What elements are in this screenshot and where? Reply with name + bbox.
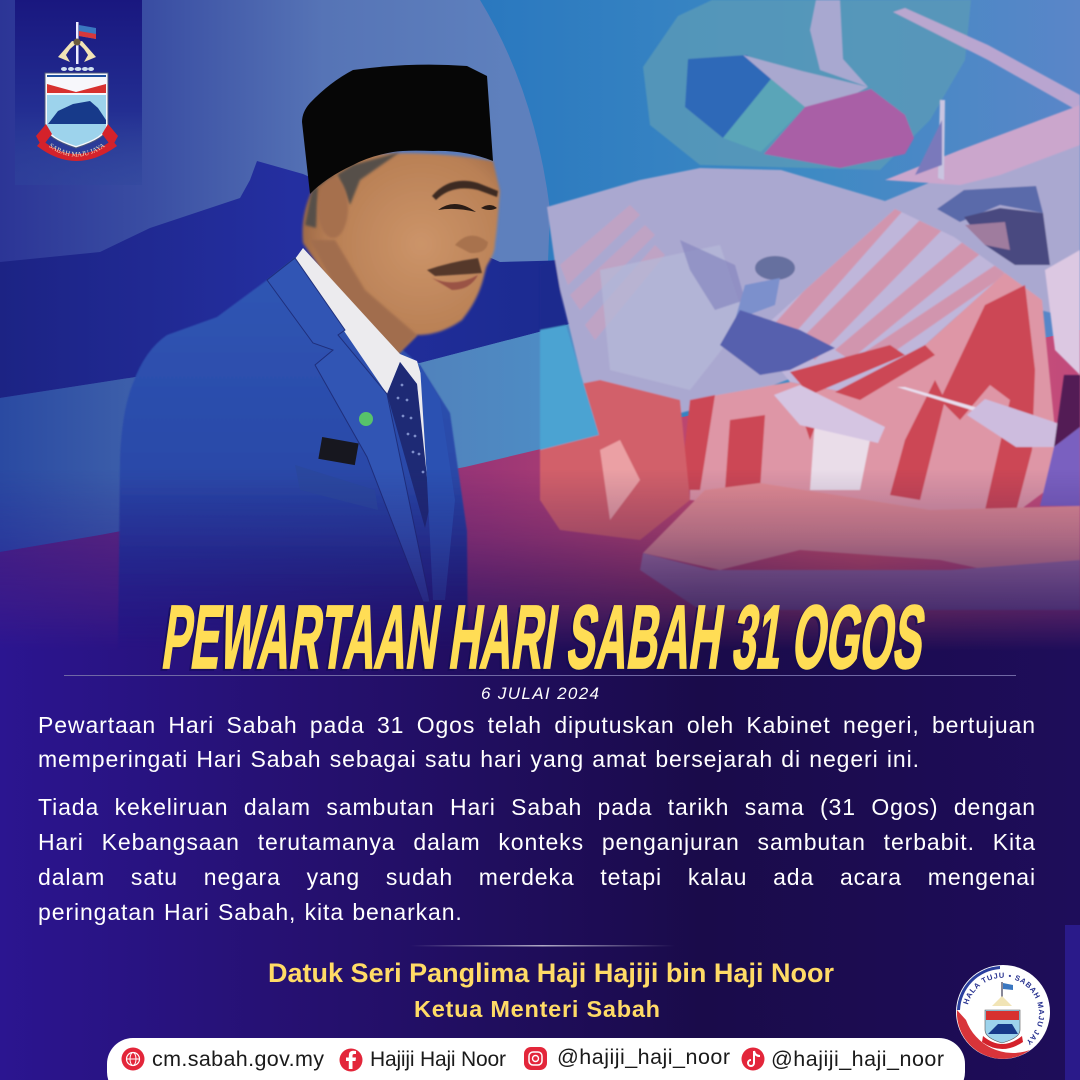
face and scarf of flag bearer <box>964 208 1050 265</box>
cap <box>302 65 493 194</box>
hat of flag bearer <box>937 186 1043 222</box>
small lightblue strip <box>540 325 599 450</box>
background: sky blue <box>0 0 1080 700</box>
lower right edge strip <box>1065 925 1080 1080</box>
shield <box>45 73 108 148</box>
portrait of the Chief Minister <box>118 65 500 650</box>
body paragraph 2: peringatan Hari Sabah, kita benarkan. <box>38 899 463 925</box>
name tag <box>318 437 359 465</box>
icon: facebook <box>340 1048 362 1072</box>
person in background silhouette <box>755 256 795 280</box>
pink flag shape <box>764 89 914 168</box>
teal flag panel <box>643 0 971 170</box>
footer pill <box>107 1038 965 1080</box>
body paragraph 2 <box>38 794 1036 925</box>
facebook text: Hajiji Haji Noor <box>370 1048 506 1071</box>
website text: cm.sabah.gov.my <box>152 1047 324 1071</box>
speaker name: Datuk Seri Panglima Haji Hajiji bin Haji Noor <box>268 958 834 988</box>
body paragraph 1: Pewartaan Hari Sabah pada 31 Ogos telah diputuskan oleh Kabinet negeri, bertujuan <box>38 712 1036 738</box>
blue flag shape <box>685 55 771 138</box>
breast pocket <box>295 465 378 510</box>
left red flag edges <box>540 380 690 540</box>
flag pole <box>893 8 1080 112</box>
icon: tiktok <box>742 1048 764 1070</box>
dark blue patch <box>540 260 566 330</box>
right lapel <box>420 365 455 600</box>
tiktok text: @hajiji_haji_noor <box>771 1047 944 1071</box>
icon: website globe <box>122 1048 144 1070</box>
big flag white body <box>754 209 1005 395</box>
flag pole and flag <box>76 22 78 64</box>
left lapel <box>267 258 430 602</box>
nose <box>455 236 488 253</box>
photo collage: flags and crowd <box>540 0 1080 610</box>
hair <box>305 152 400 228</box>
moustache <box>427 258 482 276</box>
mouth <box>432 275 478 290</box>
blue flag canton <box>720 310 835 375</box>
faded flags group <box>600 245 745 390</box>
brows <box>432 181 498 200</box>
body paragraph 1 <box>38 712 1036 772</box>
neck shadow <box>310 240 417 355</box>
instagram text: @hajiji_haji_noor <box>557 1045 730 1069</box>
teal flag stripe <box>723 79 805 152</box>
pale collage sheet <box>547 118 1080 435</box>
body paragraph 2: Tiada kekeliruan dalam sambutan Hari Sabah pada tarikh sama (31 Ogos) dengan <box>38 794 1036 820</box>
faded stripes left <box>560 205 665 340</box>
background: Sabah flag navy mountain band <box>0 161 585 398</box>
body paragraph 2: dalam satu negara yang sudah merdeka tetapi kalau ada acara mengenai <box>38 864 1036 890</box>
suit <box>118 257 468 650</box>
flag red faded stripes <box>776 209 1004 360</box>
arms crest <box>58 41 96 62</box>
lapel pin <box>359 412 373 426</box>
divider <box>410 945 675 946</box>
speaker role: Ketua Menteri Sabah <box>414 996 660 1022</box>
background: light blue band <box>0 320 600 552</box>
eyes <box>438 204 476 212</box>
bottom fade to dark purple <box>0 470 1080 1080</box>
small pole flag <box>938 100 945 180</box>
dark right shape <box>1054 375 1080 447</box>
white highlights <box>810 420 870 490</box>
gloved hands and sticks <box>774 385 885 443</box>
body paragraph 1: memperingati Hari Sabah sebagai satu hari yang amat bersejarah di negeri ini. <box>38 746 920 772</box>
Sabah coat of arms logo: SABAH MAJU JAYA <box>49 144 106 157</box>
right pale sleeve <box>1045 250 1080 375</box>
round logo: HALA TUJU • SABAH MAJU JAYA <box>963 972 1044 1046</box>
icon: instagram <box>524 1047 547 1070</box>
neck and face <box>302 153 500 355</box>
background: red band <box>0 330 1080 700</box>
title underline <box>64 675 1016 676</box>
background: right sky beyond the arc <box>480 0 1080 470</box>
necktie <box>387 362 430 528</box>
ear <box>318 178 348 238</box>
motto ribbon <box>37 140 117 161</box>
date: 6 JULAI 2024 <box>481 684 599 703</box>
logo panel background <box>15 0 142 185</box>
front cream flag <box>643 483 1080 590</box>
body paragraph 2: Hari Kebangsaan terutamanya dalam konteks penganjuran sambutan terbabit. Kita <box>38 829 1036 855</box>
shirt collar <box>295 248 432 490</box>
Sabah coat of arms logo <box>36 22 118 161</box>
pale flag stripe <box>743 55 868 110</box>
lower flag red strip section <box>690 273 1060 525</box>
